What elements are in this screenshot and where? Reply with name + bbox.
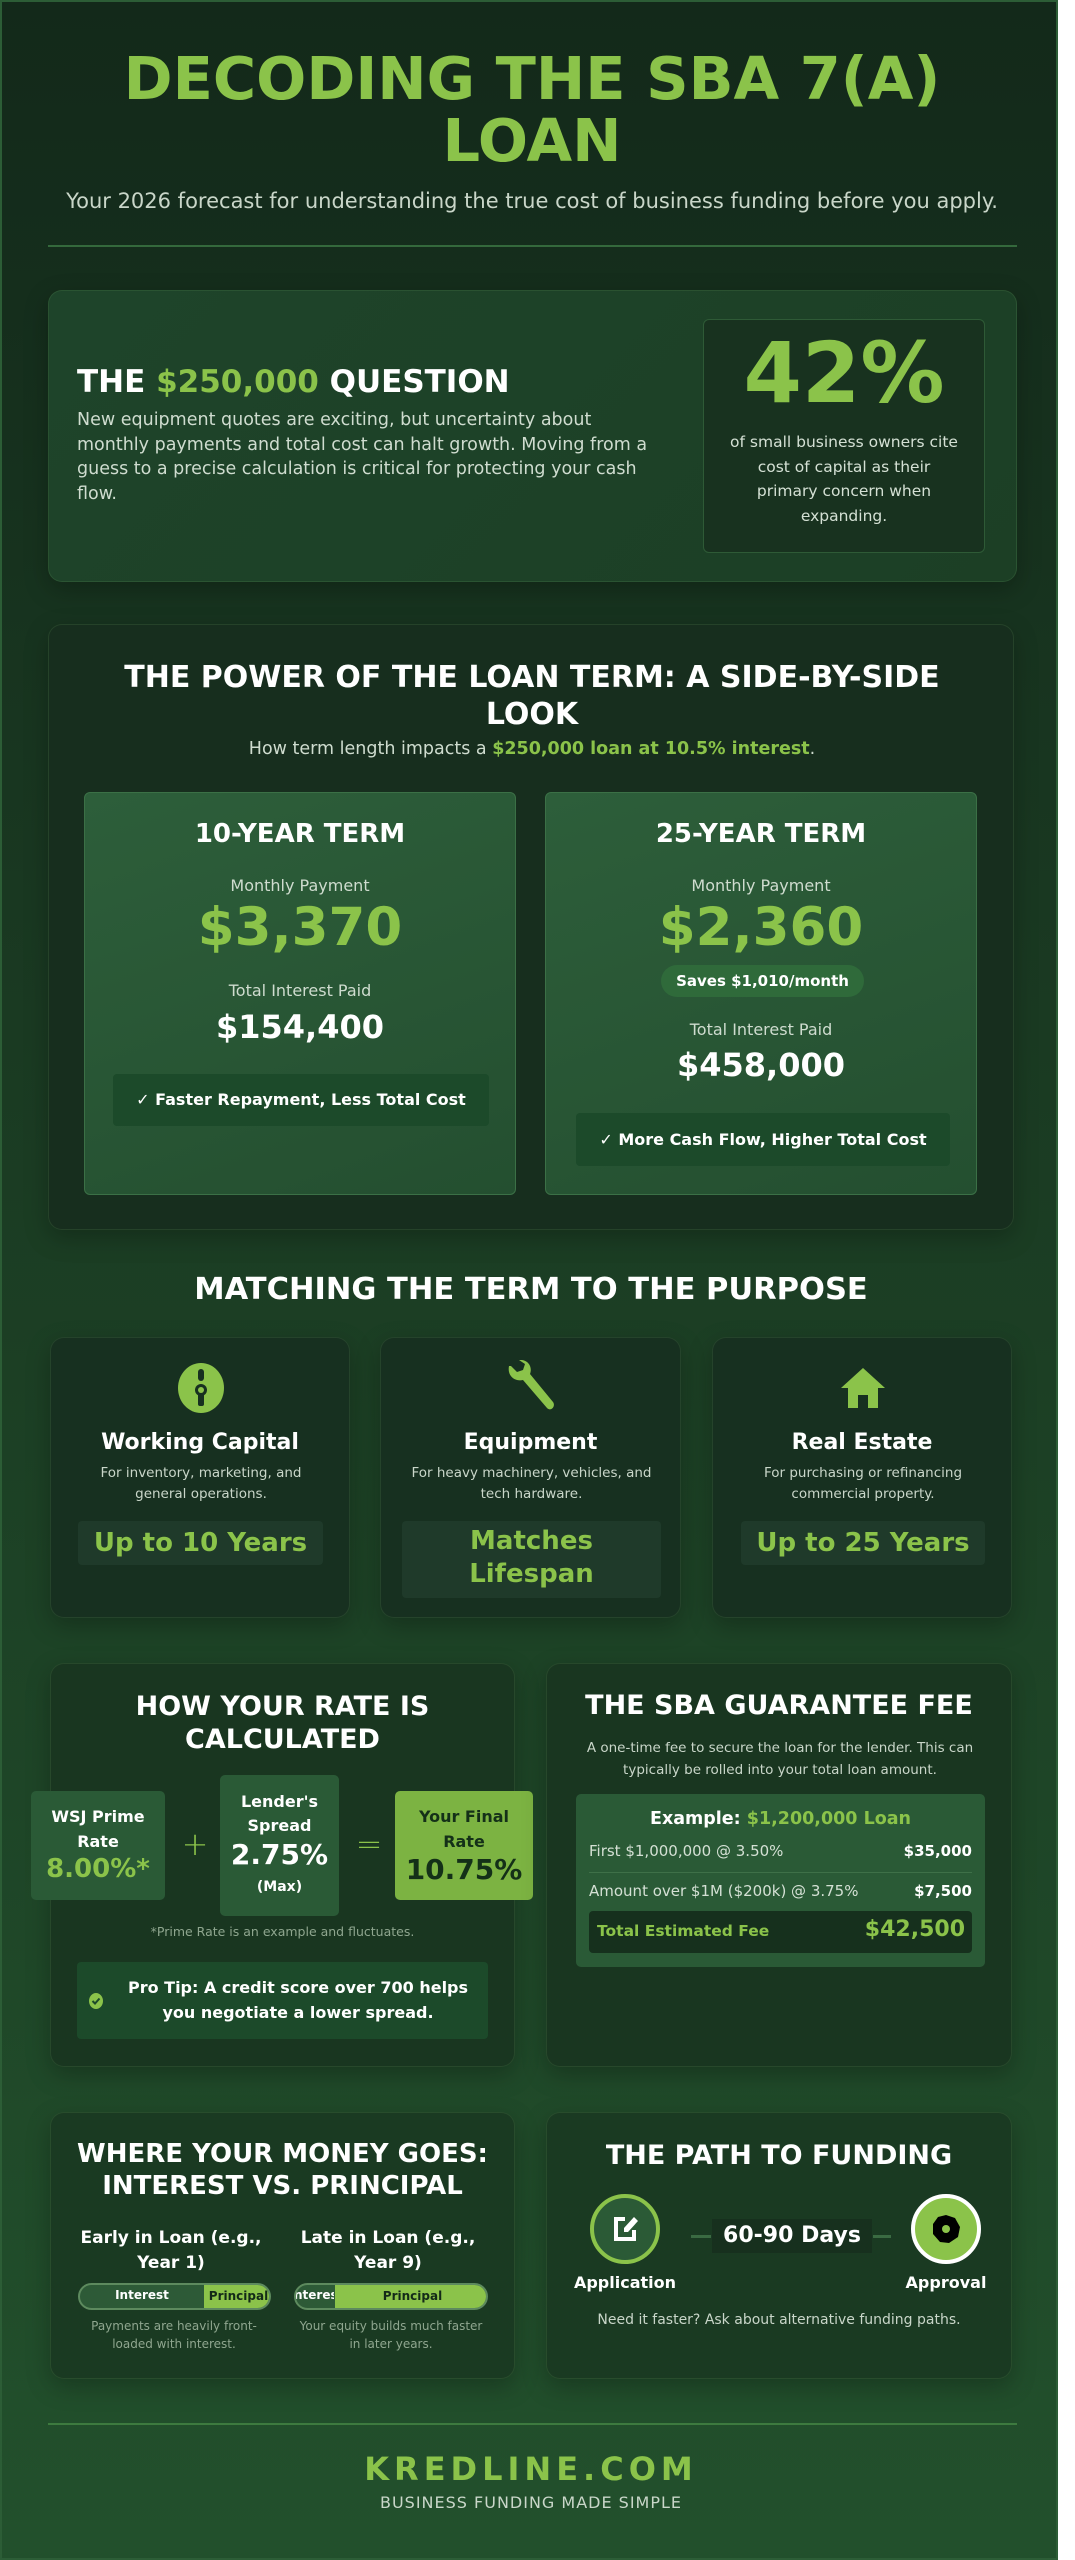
example table: $7,500 — [914, 1882, 972, 1900]
tag: Up to 10 Years — [94, 1528, 307, 1558]
late: Late in Loan (e.g., Year 9) — [301, 2228, 475, 2273]
footer: brand: KREDLINE.COM — [364, 2450, 698, 2488]
heading — [124, 660, 940, 732]
panel: path to funding: 60-90 Days — [723, 2223, 861, 2248]
footer: tagline: BUSINESS FUNDING MADE SIMPLE — [380, 2493, 682, 2512]
bar: early: Interest — [115, 2288, 169, 2302]
box: prime — [31, 1791, 165, 1900]
subheading: How term length impacts a $250,000 loan at 10.5% interest. — [249, 739, 815, 759]
stat: 42% — [703, 319, 985, 553]
subtitle: Your 2026 forecast for understanding the true cost of business funding before you apply. — [66, 189, 998, 213]
card: 25-year: $458,000 — [677, 1046, 845, 1084]
text: A one-time fee to secure the loan for the lender. This can typically be rolled into your total loan amount. — [587, 1740, 973, 1778]
box: final: 10.75% — [406, 1853, 522, 1886]
icon: application — [590, 2194, 660, 2264]
formula — [31, 1775, 533, 1916]
stat: 42%: 42% — [743, 324, 945, 422]
formula: = — [356, 1825, 382, 1863]
card: 10-year — [84, 792, 516, 1195]
tag — [402, 1521, 661, 1598]
text: intro: New equipment quotes are exciting, but uncertainty about monthly payments and total cost can halt growth. Moving from a guess to a precise calculation is critical for protecting your cash flow. — [77, 410, 647, 504]
heading: INTEREST VS. PRINCIPAL — [102, 2171, 463, 2201]
heading: HOW YOUR RATE IS — [136, 1691, 429, 1722]
example table: Amount over $1M ($200k) @ 3.75% — [589, 1882, 858, 1900]
title: DECODING THE SBA 7(A) — [124, 44, 940, 113]
example table: Example: $1,200,000 Loan — [650, 1809, 911, 1829]
panel: guarantee fee — [546, 1663, 1012, 2067]
tag — [78, 1521, 323, 1565]
bar: late — [294, 2283, 488, 2310]
card: equipment — [380, 1337, 681, 1618]
heading: the $250,000 question: THE $250,000 QUESTION — [77, 364, 510, 400]
note: Need it faster? Ask about alternative funding paths. — [597, 2312, 961, 2328]
box: prime: 8.00%* — [46, 1854, 150, 1884]
box: final: Your Final — [419, 1807, 509, 1826]
panel: loan term comparison — [48, 624, 1014, 1230]
connector: 60-90 days — [691, 2235, 711, 2238]
heading: THE PATH TO FUNDING — [606, 2140, 952, 2171]
box: spread: 2.75% — [231, 1838, 328, 1871]
badge: ✓ Faster Repayment, Less Total Cost — [136, 1090, 466, 1109]
icon: house — [841, 1368, 885, 1408]
card: real estate: For purchasing or refinancing commercial property. — [764, 1465, 962, 1502]
panel: interest vs principal — [50, 2112, 515, 2379]
bar: early — [78, 2283, 271, 2310]
pill: saves: Saves $1,010/month — [676, 972, 849, 990]
tag — [741, 1521, 985, 1565]
card: real estate: Real Estate — [792, 1430, 932, 1455]
formula: + — [182, 1825, 208, 1863]
card: 25-year: Monthly Payment — [691, 876, 831, 895]
badge — [113, 1074, 489, 1126]
icon: approval — [911, 2194, 981, 2264]
icon: money bag — [178, 1363, 224, 1413]
heading: THE POWER OF THE LOAN TERM: A SIDE-BY-SIDE — [124, 660, 940, 695]
pro tip — [77, 1962, 488, 2039]
title: LOAN — [442, 106, 622, 175]
card: working capital: For inventory, marketing, and general operations. — [100, 1465, 301, 1502]
card: working capital — [50, 1337, 350, 1618]
card: working capital: Working Capital — [101, 1430, 299, 1455]
card: 10-year: Monthly Payment — [230, 876, 370, 895]
icon: wrench — [508, 1360, 554, 1410]
title — [124, 44, 940, 175]
panel: interest vs principal: Your equity builds much faster in later years. — [300, 2319, 482, 2351]
box: final — [395, 1791, 533, 1900]
example table — [576, 1794, 985, 1967]
pill: saves — [661, 965, 864, 997]
panel: path to funding — [546, 2112, 1012, 2379]
panel: interest vs principal: Payments are heavily front-loaded with interest. — [91, 2319, 257, 2351]
box: prime: WSJ Prime — [51, 1807, 145, 1826]
note: *Prime Rate is an example and fluctuates. — [151, 1924, 414, 1939]
card: 10-year: 10-YEAR TERM — [195, 819, 405, 849]
tag: Lifespan — [469, 1559, 594, 1589]
card: real estate — [712, 1337, 1012, 1618]
card: equipment: For heavy machinery, vehicles, and tech hardware. — [411, 1465, 652, 1502]
heading: THE SBA GUARANTEE FEE — [585, 1690, 973, 1721]
heading: WHERE YOUR MONEY GOES: — [77, 2139, 488, 2169]
card: 10-year: $154,400 — [216, 1008, 384, 1046]
card: 25-year: Total Interest Paid — [690, 1020, 832, 1039]
total: Total Estimated Fee — [597, 1922, 769, 1940]
total: $42,500 — [865, 1917, 965, 1942]
tag: Matches — [470, 1526, 593, 1556]
pro tip: Pro Tip: A credit score over 700 helps you negotiate a lower spread. — [128, 1978, 468, 2022]
example table: First $1,000,000 @ 3.50% — [589, 1842, 783, 1860]
heading: matching term: MATCHING THE TERM TO THE PURPOSE — [194, 1272, 868, 1307]
heading — [136, 1691, 429, 1755]
stat: 42%: of small business owners cite cost of capital as their primary concern when expanding. — [730, 433, 958, 524]
bar: late: Principal — [383, 2289, 442, 2303]
box: spread — [220, 1775, 339, 1916]
box: spread: (Max) — [257, 1879, 302, 1895]
panel: path to funding: Application — [574, 2273, 676, 2292]
card: 10-year: $3,370 — [198, 897, 402, 958]
badge: ✓ More Cash Flow, Higher Total Cost — [599, 1130, 927, 1149]
bar: early: Principal — [209, 2289, 268, 2303]
early: Early in Loan (e.g., Year 1) — [80, 2228, 262, 2273]
panel: $250,000 question — [48, 290, 1017, 582]
panel: path to funding: Approval — [906, 2273, 986, 2292]
panel: rate calculation — [50, 1663, 515, 2067]
tag: Up to 25 Years — [756, 1528, 970, 1558]
card: 10-year: Total Interest Paid — [229, 981, 371, 1000]
box: final: Rate — [443, 1832, 485, 1851]
box: spread: Spread — [248, 1816, 311, 1835]
card: equipment: Equipment — [464, 1430, 597, 1455]
box: spread: Lender's — [241, 1792, 318, 1811]
card: 25-year: $2,360 — [659, 897, 863, 958]
heading — [77, 2139, 488, 2201]
badge — [576, 1113, 950, 1166]
example table: $35,000 — [904, 1842, 972, 1860]
total — [589, 1911, 972, 1953]
card: 25-year — [545, 792, 977, 1195]
card: 25-year: 25-YEAR TERM — [656, 819, 866, 849]
heading: LOOK — [486, 697, 578, 732]
box: prime: Rate — [77, 1832, 119, 1851]
heading: CALCULATED — [185, 1724, 380, 1755]
